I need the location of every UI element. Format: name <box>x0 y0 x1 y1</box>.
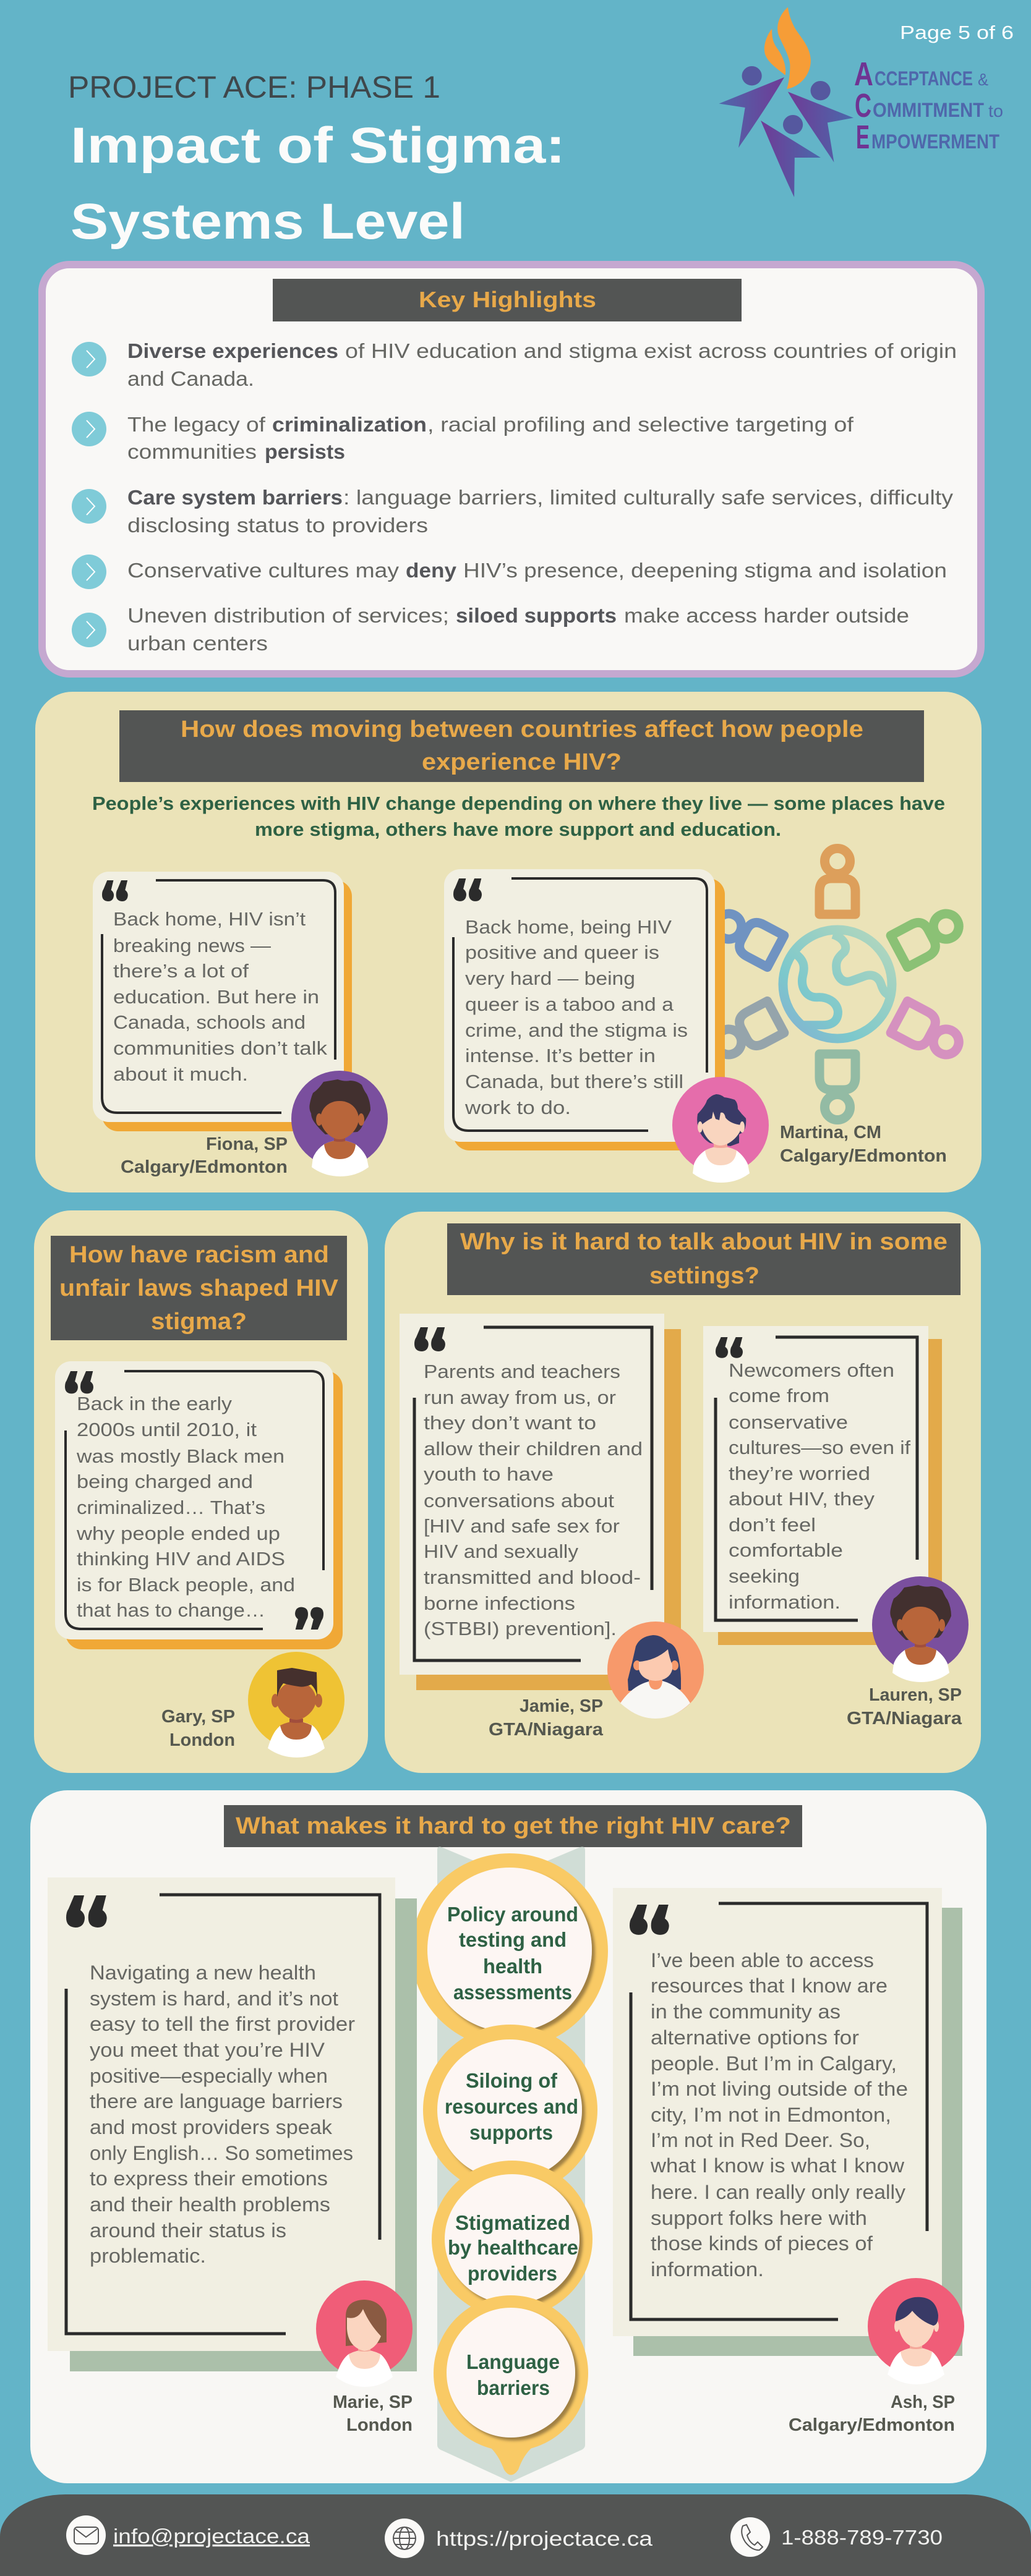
quote text: Martina: queer is a taboo and a <box>465 993 674 1015</box>
quote text: Marie: and most providers speak <box>90 2116 333 2138</box>
quote text: Jamie: allow their children and <box>424 1438 643 1460</box>
quote text: Ash: city, I’m not in Edmonton, <box>651 2104 891 2126</box>
highlight 4 <box>72 555 947 589</box>
quote text: Ash: information. <box>651 2258 764 2281</box>
quote: Marie <box>48 1877 417 2371</box>
name: Gary <box>161 1707 235 1750</box>
icon: closing quote mark <box>295 1607 323 1630</box>
bubble: stigmatized: Stigmatized <box>455 2211 570 2234</box>
quote text: Lauren: about HIV, they <box>729 1488 875 1510</box>
icon: opening quote mark <box>65 1371 93 1393</box>
name: Ash: Calgary/Edmonton <box>789 2415 955 2435</box>
avatar: Martina <box>672 1077 769 1183</box>
heading: racism and unfair laws: stigma? <box>151 1309 247 1335</box>
quote text: Gary: thinking HIV and AIDS <box>77 1548 285 1570</box>
highlight 3: : language barriers, limited culturally safe services, difficulty <box>343 486 954 509</box>
icon: email <box>66 2515 106 2555</box>
name: Marie <box>333 2392 413 2435</box>
email address: info@projectace.ca <box>113 2525 310 2548</box>
highlight 5: urban centers <box>127 632 268 655</box>
logo wordmark: MPOWERMENT <box>871 130 999 153</box>
quote text: Marie: positive—especially when <box>90 2065 328 2087</box>
panel: hard to talk about HIV <box>385 1212 981 1773</box>
highlight 4: deny <box>406 559 457 582</box>
logo wordmark: C <box>855 87 871 124</box>
avatar: Marie <box>316 2281 413 2387</box>
quote text: Marie: problematic. <box>90 2245 206 2267</box>
subheading: more stigma, others have more support and education. <box>255 818 781 840</box>
quote: Ash <box>613 1888 962 2356</box>
name: Gary: Gary, SP <box>161 1707 235 1727</box>
icon: quote mark <box>630 1905 669 1935</box>
bubble: siloing: supports <box>469 2121 553 2144</box>
quote: Fiona <box>93 872 352 1131</box>
name: Fiona: Calgary/Edmonton <box>121 1157 288 1177</box>
quote text: Fiona: breaking news — <box>113 935 271 956</box>
quote text: Ash: I’m not living outside of the <box>651 2078 908 2100</box>
quote: Gary <box>55 1361 343 1649</box>
highlight 3: Care system barriers <box>127 486 343 509</box>
name: Martina: Martina, CM <box>780 1123 881 1142</box>
name: Gary: London <box>169 1730 235 1750</box>
logo wordmark: OMMITMENT <box>873 99 984 121</box>
phone number: 1-888-789-7730 <box>781 2526 943 2549</box>
icon: phone <box>730 2517 770 2557</box>
heading: right HIV care <box>224 1805 802 1847</box>
quote text: Lauren <box>729 1359 910 1613</box>
bubble: policy <box>411 1853 608 2049</box>
quote text: Fiona: about it much. <box>113 1063 248 1085</box>
heading: hard to talk about HIV <box>447 1223 960 1295</box>
name: Lauren: GTA/Niagara <box>847 1709 962 1728</box>
highlight 3 <box>72 486 954 537</box>
quote text: Gary: Back in the early <box>77 1393 233 1414</box>
quote text: Ash: support folks here with <box>651 2207 867 2229</box>
name: Fiona: Fiona, SP <box>206 1134 288 1154</box>
quote text: Jamie: (STBBI) prevention]. <box>424 1618 617 1639</box>
logo wordmark: A <box>854 56 873 93</box>
main title <box>71 117 565 250</box>
quote text: Ash: I’ve been able to access <box>651 1949 874 1971</box>
name: Fiona <box>121 1134 288 1177</box>
quote text: Ash <box>650 1949 908 2281</box>
quote text: Lauren: they’re worried <box>729 1463 870 1484</box>
heading: right HIV care: What makes it hard to get the right HIV care? <box>236 1813 791 1839</box>
quote text: Jamie <box>424 1361 643 1639</box>
highlight 1 <box>72 339 957 390</box>
name: Lauren <box>847 1685 962 1728</box>
quote text: Marie: system is hard, and it’s not <box>90 1987 338 2010</box>
quote text: Gary: criminalized… That’s <box>77 1497 265 1518</box>
quote text: Jamie: HIV and sexually <box>424 1541 579 1562</box>
website: https://projectace.ca <box>436 2527 653 2550</box>
highlight 3: disclosing status to providers <box>127 514 428 537</box>
quote text: Lauren: don’t feel <box>729 1514 816 1536</box>
highlight 2: persists <box>265 440 345 463</box>
icon: flame and three people <box>719 7 853 197</box>
bubble: policy: assessments <box>453 1981 572 2004</box>
icon: quote mark <box>453 878 482 901</box>
quote text: Ash: alternative options for <box>651 2026 859 2049</box>
avatar: Ash <box>868 2278 964 2384</box>
name: Jamie: GTA/Niagara <box>489 1720 604 1740</box>
highlight 5 <box>72 604 909 655</box>
name: Jamie <box>489 1696 604 1740</box>
icon: quote mark <box>716 1337 743 1358</box>
quote text: Jamie: they don’t want to <box>424 1412 596 1434</box>
quote text: Ash: in the community as <box>651 2000 841 2023</box>
highlight 5: make access harder outside <box>624 604 909 627</box>
subheading <box>92 793 945 840</box>
quote text: Martina: Canada, but there’s still <box>465 1071 683 1092</box>
quote text: Gary: why people ended up <box>76 1523 280 1544</box>
quote text: Gary: that has to change… <box>77 1599 265 1621</box>
quote text: Marie: to express their emotions <box>90 2167 328 2190</box>
quote text: Ash: what I know is what I know <box>650 2154 905 2177</box>
quote text: Lauren: seeking <box>729 1565 800 1587</box>
heading: key highlights: Key Highlights <box>419 287 596 312</box>
logo wordmark: & <box>978 70 988 89</box>
icon: quote mark <box>102 880 128 901</box>
quote text: Gary: was mostly Black men <box>76 1445 284 1467</box>
quote text: Lauren: information. <box>729 1591 841 1613</box>
quote text: Marie: around their status is <box>90 2219 286 2242</box>
logo wordmark: E <box>856 119 870 156</box>
quote text: Gary <box>76 1393 295 1621</box>
highlight 1: of HIV education and stigma exist across countries of origin <box>345 339 957 362</box>
heading: moving between countries: How does moving between countries affect how people <box>181 716 863 742</box>
name: Ash <box>789 2392 955 2435</box>
heading: hard to talk about HIV: Why is it hard to talk about HIV in some <box>460 1229 948 1255</box>
bubble: siloing: resources and <box>445 2095 578 2118</box>
quote text: Martina: crime, and the stigma is <box>465 1019 688 1041</box>
heading: moving between countries: experience HIV? <box>422 749 622 775</box>
title block <box>68 70 565 250</box>
highlight 4: HIV’s presence, deepening stigma and isolation <box>463 559 947 582</box>
quote text: Fiona: there’s a lot of <box>113 960 249 982</box>
quote text: Fiona: education. But here in <box>113 986 319 1008</box>
logo wordmark <box>854 56 1003 156</box>
quote text: Lauren: comfortable <box>729 1539 843 1561</box>
bubble: stigmatized: by healthcare <box>448 2236 578 2259</box>
bubble: siloing <box>423 2025 597 2195</box>
quote text: Jamie: conversations about <box>424 1490 614 1511</box>
highlight 4: Conservative cultures may <box>127 559 400 582</box>
panel: right HIV care <box>30 1790 986 2483</box>
quote text: Fiona: Canada, schools and <box>113 1011 306 1033</box>
avatar: Lauren <box>872 1576 969 1682</box>
name: Lauren: Lauren, SP <box>869 1685 962 1705</box>
quote text: Marie: Navigating a new health <box>90 1962 316 1984</box>
quote: Lauren <box>703 1326 942 1645</box>
quote text: Martina: positive and queer is <box>465 942 659 963</box>
quote text: Martina: work to do. <box>464 1097 571 1118</box>
quote: Martina <box>444 869 725 1150</box>
icon: quote mark <box>414 1327 445 1351</box>
bubble: policy: Policy around <box>447 1903 578 1926</box>
name: Ash: Ash, SP <box>891 2392 955 2412</box>
avatar: Gary <box>248 1652 344 1758</box>
heading: moving between countries <box>119 710 924 782</box>
bubble: siloing: Siloing of <box>466 2069 558 2092</box>
quote text: Martina: intense. It’s better in <box>465 1045 656 1066</box>
bubble: stigmatized: providers <box>468 2262 557 2285</box>
highlight 1: Diverse experiences <box>127 339 338 362</box>
panel: key highlights <box>42 265 981 674</box>
highlight 5: Uneven distribution of services; <box>127 604 449 627</box>
footer <box>0 2494 1031 2576</box>
quote text: Jamie: run away from us, or <box>424 1387 616 1408</box>
quote text: Lauren: come from <box>729 1385 829 1406</box>
bubble: policy: health <box>483 1955 542 1978</box>
quote text: Gary: being charged and <box>77 1471 253 1492</box>
logo: ACE <box>719 7 1003 197</box>
quote text: Lauren: Newcomers often <box>729 1359 894 1381</box>
quote text: Ash: here. I can really only really <box>651 2181 905 2203</box>
quote text: Martina: very hard — being <box>465 967 635 989</box>
bubble: policy: testing and <box>459 1928 567 1951</box>
heading: key highlights <box>273 279 742 321</box>
bubble: language <box>434 2295 588 2475</box>
quote text: Fiona: communities don’t talk <box>113 1037 328 1059</box>
quote text: Lauren: cultures—so even if <box>729 1437 910 1458</box>
quote text: Fiona <box>113 908 328 1085</box>
quote text: Ash: people. But I’m in Calgary, <box>651 2052 897 2075</box>
quote text: Ash: resources that I know are <box>651 1975 888 1997</box>
quote text: Jamie: [HIV and safe sex for <box>424 1515 620 1537</box>
heading: racism and unfair laws <box>51 1236 347 1340</box>
logo wordmark: to <box>988 101 1003 121</box>
name: Marie: London <box>346 2415 413 2435</box>
highlight 2: criminalization <box>272 413 427 436</box>
quote text: Lauren: conservative <box>729 1411 848 1433</box>
panel: moving between countries <box>35 692 982 1192</box>
main title: Systems Level <box>71 193 465 250</box>
quote text: Jamie: transmitted and blood- <box>424 1566 641 1588</box>
avatar: Fiona <box>291 1071 388 1176</box>
quote text: Marie: and their health problems <box>90 2193 330 2216</box>
highlight 2: The legacy of <box>127 413 266 436</box>
quote text: Marie: there are language barriers <box>90 2090 343 2112</box>
quote text: Gary: 2000s until 2010, it <box>77 1419 257 1440</box>
name: Martina <box>780 1123 947 1166</box>
quote text: Marie: only English… So sometimes <box>90 2142 353 2164</box>
bubble: language: barriers <box>477 2376 550 2399</box>
subheading: People’s experiences with HIV change depending on where they live — some places have <box>92 793 945 814</box>
quote text: Martina <box>464 916 688 1118</box>
name: Jamie: Jamie, SP <box>520 1696 603 1716</box>
quote text: Marie <box>90 1962 355 2267</box>
highlight 2: communities <box>127 440 257 463</box>
kicker: PROJECT ACE: PHASE 1 <box>68 70 440 104</box>
main title: Impact of Stigma: <box>71 117 565 174</box>
ribbon <box>437 1847 585 2482</box>
quote: Jamie <box>400 1314 681 1690</box>
heading: racism and unfair laws: How have racism and <box>69 1242 329 1268</box>
avatar: Jamie <box>607 1622 704 1719</box>
highlight 5: siloed supports <box>456 604 617 627</box>
quote text: Jamie: borne infections <box>424 1592 575 1614</box>
quote text: Jamie: youth to have <box>424 1463 554 1485</box>
icon: quote mark <box>66 1895 107 1928</box>
quote text: Marie: you meet that you’re HIV <box>90 2039 325 2061</box>
quote text: Martina: Back home, being HIV <box>465 916 672 938</box>
icon: globe with people around it <box>709 848 965 1120</box>
heading: hard to talk about HIV: settings? <box>649 1263 759 1289</box>
quote text: Ash: those kinds of pieces of <box>651 2232 873 2255</box>
name: Martina: Calgary/Edmonton <box>780 1146 947 1166</box>
bubble: stigmatized <box>432 2161 593 2318</box>
quote text: Marie: easy to tell the first provider <box>90 2013 355 2035</box>
highlight 2: , racial profiling and selective targeting of <box>427 413 854 436</box>
quote text: Fiona: Back home, HIV isn’t <box>113 908 306 930</box>
quote text: Gary: is for Black people, and <box>77 1574 295 1596</box>
bubble: language: Language <box>466 2350 560 2373</box>
panel: racism and unfair laws <box>34 1210 368 1773</box>
page number: Page 5 of 6 <box>900 22 1014 43</box>
heading: racism and unfair laws: unfair laws shaped HIV <box>59 1275 339 1301</box>
quote text: Ash: I’m not in Red Deer. So, <box>651 2129 870 2151</box>
quote text: Jamie: Parents and teachers <box>424 1361 620 1382</box>
logo wordmark: CCEPTANCE <box>875 67 973 90</box>
icon: web globe <box>385 2519 424 2558</box>
highlight 2 <box>72 412 854 463</box>
name: Marie: Marie, SP <box>333 2392 413 2412</box>
highlight 1: and Canada. <box>127 367 254 390</box>
